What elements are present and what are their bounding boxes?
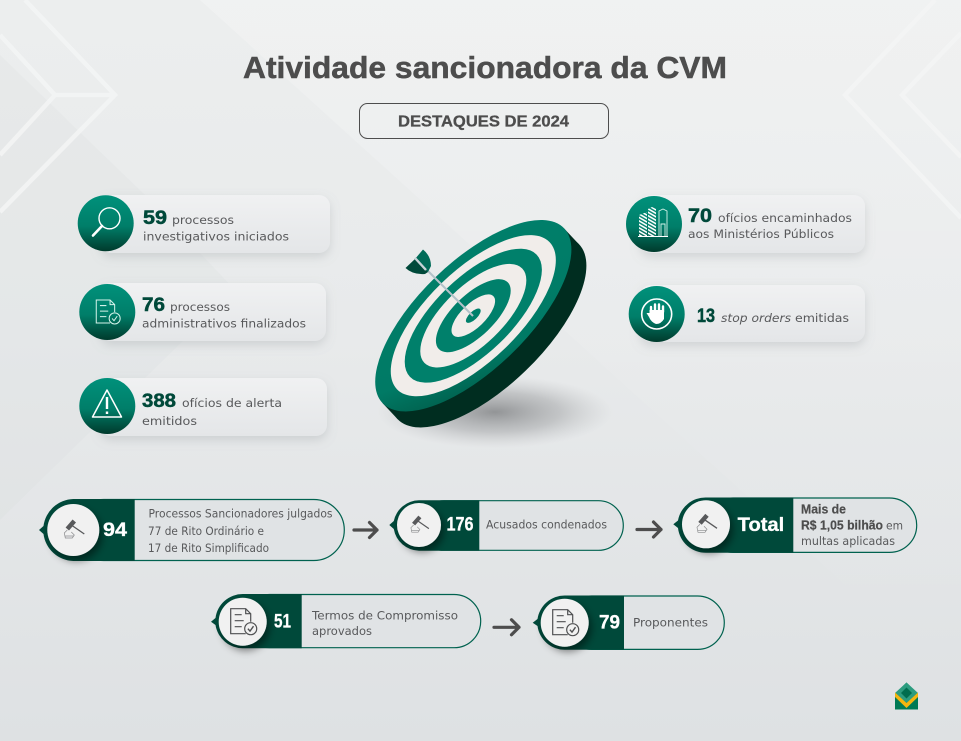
pill: 94 processos sancionadores (39, 499, 344, 561)
panel: 388 ofícios de alerta: 388 (142, 391, 176, 412)
icon: document with check (219, 598, 267, 646)
panel: 59 processos investigativos: processos (172, 213, 234, 227)
panel: 76 processos administrativos: 76 (142, 295, 165, 316)
panel: 59 processos investigativos: 59 (143, 208, 167, 229)
icon: magnifier (78, 195, 134, 251)
panel: 13 stop orders: 13 (697, 306, 715, 327)
pill: 79 proponentes (533, 595, 724, 650)
panel: 70 ofícios encaminhados (626, 195, 865, 253)
subtitle box: DESTAQUES DE 2024 (398, 114, 569, 130)
pill: 79 proponentes: Proponentes (633, 616, 708, 630)
pill: 94 processos sancionadores: Processos Sancionadores julgados (148, 506, 333, 520)
logo: CVM (895, 682, 918, 710)
pill: 79 proponentes: 79 (599, 612, 620, 634)
panel: 13 stop orders: emitidas (795, 311, 849, 325)
panel: 388 ofícios de alerta (79, 378, 327, 436)
panel: 59 processos investigativos (78, 195, 330, 253)
pill: 176 acusados condenados (389, 500, 623, 551)
icon: document with check (79, 284, 135, 340)
pill: 51 termos de compromisso: 51 (274, 612, 291, 632)
pill: 176 acusados condenados: 176 (446, 515, 474, 536)
panel: 70 ofícios encaminhados: 70 (688, 206, 712, 227)
panel: 13 stop orders (629, 285, 865, 342)
panel: 388 ofícios de alerta: ofícios de alerta (182, 396, 282, 410)
pill: 94 processos sancionadores: 77 de Rito Ordinário e (148, 524, 264, 538)
pill: total multas: Mais de (801, 502, 846, 516)
icon: warning triangle (79, 378, 135, 434)
panel: 76 processos administrativos: administrativos finalizados (142, 316, 306, 330)
panel: 76 processos administrativos: processos (170, 300, 230, 314)
icon: document with check (541, 599, 589, 647)
icon: stop hand (629, 286, 685, 342)
panel: 13 stop orders: stop orders (721, 311, 791, 325)
pill: 51 termos de compromisso (211, 594, 481, 648)
arrow (637, 522, 661, 537)
illustration: target with dart (345, 189, 616, 458)
pill: total multas: R$ 1,05 bilhão (801, 518, 883, 532)
pill: total multas (673, 497, 917, 553)
icon: buildings (626, 196, 682, 252)
icon: gavel (397, 503, 441, 547)
panel: 70 ofícios encaminhados: ofícios encaminhados (718, 211, 852, 225)
panel: 388 ofícios de alerta: emitidos (142, 414, 197, 428)
pill: total multas: multas aplicadas (801, 534, 895, 548)
panel: 59 processos investigativos: investigativos iniciados (143, 230, 289, 244)
panel: 76 processos administrativos (79, 283, 326, 341)
pill: total multas: Total (738, 515, 784, 536)
panel: 70 ofícios encaminhados: aos Ministérios Públicos (688, 227, 834, 241)
icon: gavel (47, 504, 99, 556)
pill: 176 acusados condenados: Acusados condenados (486, 518, 607, 532)
pill: 94 processos sancionadores: 17 de Rito Simplificado (148, 541, 269, 555)
pill: total multas: em (886, 518, 903, 532)
pill: 51 termos de compromisso: aprovados (312, 624, 372, 638)
icon: gavel (682, 500, 730, 548)
pill: 94 processos sancionadores: 94 (103, 520, 127, 541)
subtitle box (360, 104, 608, 138)
pill: 51 termos de compromisso: Termos de Compromisso (311, 609, 458, 623)
title: Atividade sancionadora da CVM (243, 50, 727, 85)
arrow (354, 522, 377, 538)
arrow (494, 620, 519, 635)
